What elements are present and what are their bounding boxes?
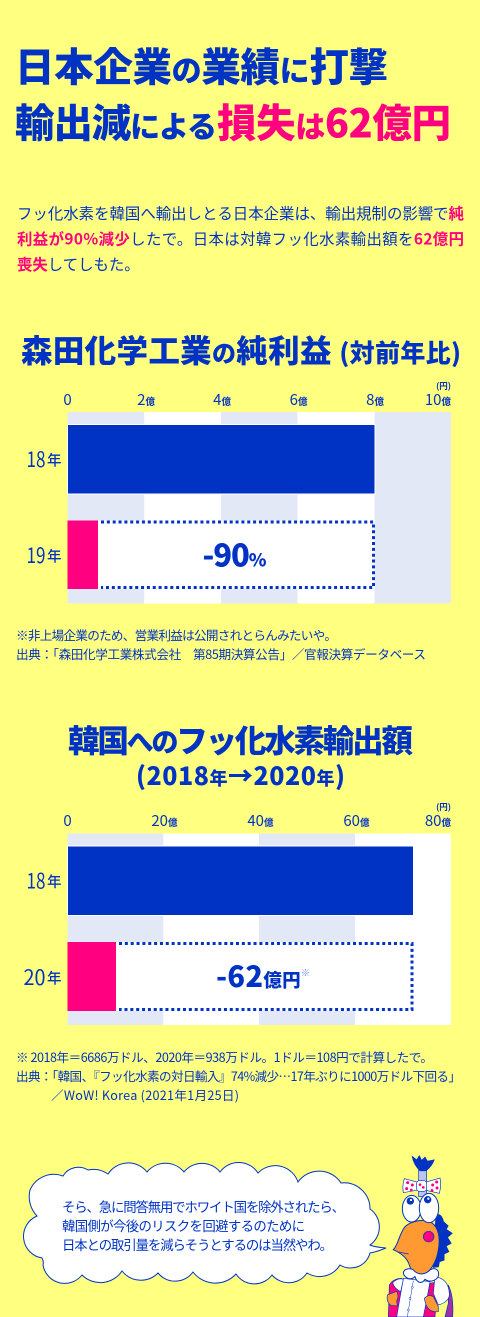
axis labels: 2億 — [137, 389, 155, 410]
year labels: 年 — [47, 546, 62, 566]
hands — [387, 1291, 398, 1306]
hair — [433, 1215, 452, 1267]
bar: 20 — [68, 942, 414, 1011]
axis labels — [63, 380, 451, 410]
speech bubble — [24, 1162, 386, 1284]
bar: 18 — [68, 846, 414, 916]
axis labels: 40億 — [247, 810, 274, 831]
chart 2 notes: ／WoW! Korea (2021年1月25日) — [51, 1085, 239, 1104]
axis labels — [63, 801, 451, 831]
bubble text: 韓国側が今後のリスクを回避するのために — [62, 1215, 305, 1235]
chart 1 notes — [16, 625, 426, 663]
heading: chart 2: 韓国へのフッ化水素輸出額 — [68, 716, 413, 762]
axis labels: 6億 — [290, 389, 308, 410]
bar: 20: ※ — [301, 966, 310, 979]
title — [15, 36, 451, 150]
year labels: 20 — [24, 962, 46, 992]
heading: chart 2 — [68, 716, 413, 793]
bar: 20: -62億円 — [216, 954, 301, 996]
axis labels: (円) — [436, 801, 451, 813]
chart 1 notes: ※非上場企業のため、営業利益は公開されとらんみたいや。 — [16, 625, 337, 644]
year labels — [24, 866, 62, 992]
year labels: 19 — [26, 540, 46, 570]
antenna — [419, 1169, 427, 1197]
intro text: フッ化水素を韓国へ輸出しとる日本企業は、輸出規制の影響で純 — [17, 202, 464, 224]
bubble text — [62, 1196, 345, 1254]
intro text: 喪失してしもた。 — [17, 253, 140, 275]
collar — [403, 1269, 439, 1282]
year labels: 年 — [47, 968, 62, 988]
bar: 19 — [68, 520, 374, 589]
bar: 19: -90% — [202, 530, 267, 576]
cheek — [423, 1231, 434, 1242]
plot bands — [68, 412, 451, 604]
axis labels: 4億 — [213, 389, 231, 410]
chart 2 notes: ※ 2018年＝6686万ドル、2020年＝938万ドル。1ドル＝108円で計算したで。 — [16, 1047, 433, 1066]
bow — [403, 1178, 441, 1193]
intro text — [17, 202, 464, 275]
title: 損失は62億円 — [217, 92, 451, 150]
axis labels: 8億 — [366, 389, 384, 410]
year labels: 年 — [47, 871, 62, 892]
axis labels: 0 — [63, 810, 72, 831]
bubble text: そら、急に問答無用でホワイト国を除外されたら、 — [62, 1196, 345, 1216]
plot bands — [68, 834, 451, 1025]
axis labels: 80億 — [425, 810, 451, 831]
chart 1: net profit — [26, 380, 451, 604]
chart 2 notes: 出典：「韓国、『フッ化水素の対日輸入』74%減少…17年ぶりに1000万ドル下回る」 — [16, 1066, 461, 1085]
chart 2 notes — [16, 1047, 461, 1104]
title: 輸出減による — [15, 92, 217, 150]
year labels — [26, 444, 62, 570]
year labels: 18 — [26, 866, 46, 896]
heading: chart 2: (2018年→2020年) — [136, 757, 345, 793]
eyes — [402, 1193, 439, 1223]
bar: 18 — [68, 424, 375, 494]
backpack and shirt — [388, 1277, 453, 1317]
chart 1 notes: 出典：「森田化学工業株式会社 第85期決算公告」／官報決算データベース — [16, 644, 426, 663]
bubble text: 日本との取引量を減らそうとするのは当然やわ。 — [62, 1234, 333, 1254]
mascot — [387, 1156, 453, 1317]
axis labels: 20億 — [151, 810, 178, 831]
heading: chart 1: 森田化学工業の純利益 (対前年比) — [21, 326, 461, 372]
year labels: 18 — [26, 444, 46, 474]
axis labels: 0 — [63, 389, 72, 410]
chart 2: exports — [24, 801, 451, 1025]
intro text: 利益が90%減少したで。日本は対韓フッ化水素輸出額を62億円 — [17, 228, 464, 250]
axis labels: (円) — [436, 380, 451, 392]
axis labels: 60億 — [343, 810, 370, 831]
head — [393, 1220, 439, 1276]
title: 日本企業の業績に打撃 — [15, 36, 388, 94]
year labels: 年 — [47, 450, 62, 470]
axis labels: 10億 — [425, 389, 451, 410]
